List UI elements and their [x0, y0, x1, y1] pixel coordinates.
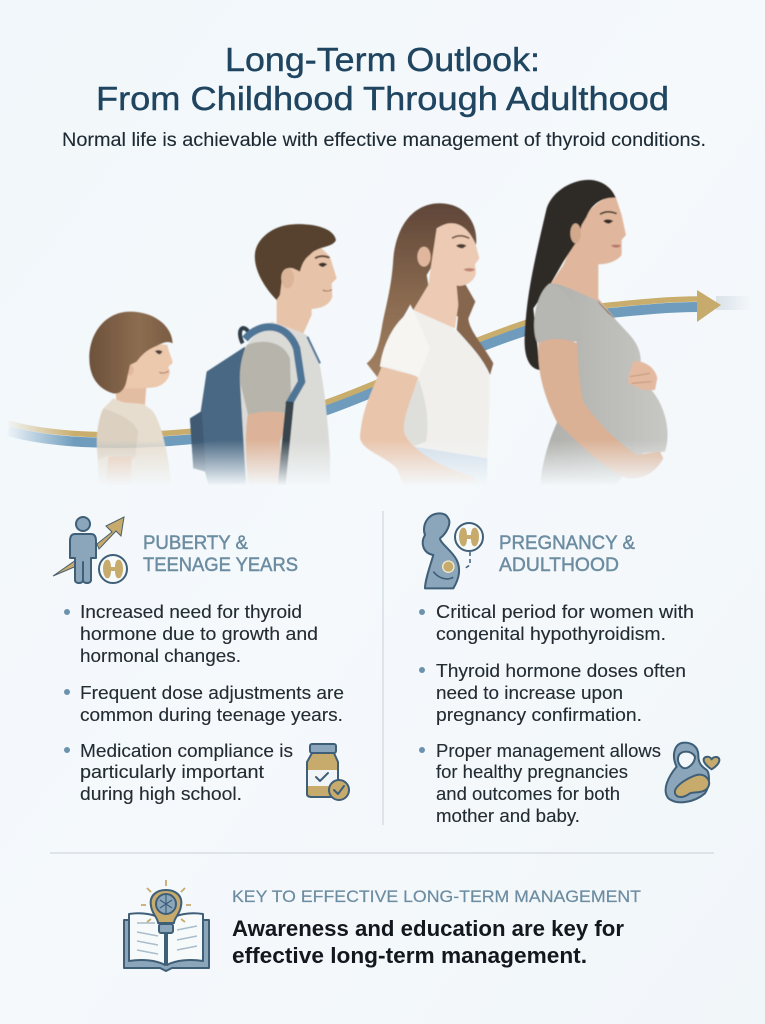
key message: effective long-term management.	[232, 943, 587, 968]
heading: TEENAGE YEARS	[143, 555, 298, 576]
bullet: dose adjustments: common during teenage years.	[80, 705, 343, 725]
panel: key to effective long-term management	[124, 880, 641, 971]
bullet: medication compliance	[64, 741, 293, 804]
bullet: proper management: for healthy pregnancies	[436, 762, 628, 782]
key message	[232, 916, 624, 968]
icon: mother holding baby	[666, 743, 719, 802]
bullet: critical period: congenital hypothyroidism.	[436, 624, 666, 644]
icon: teen with growth arrow and thyroid	[53, 517, 127, 583]
divider: horizontal	[50, 852, 714, 854]
divider: vertical	[382, 511, 384, 825]
subtitle: Normal life is achievable with effective management of thyroid conditions.	[62, 130, 706, 151]
heading: PREGNANCY &	[499, 533, 635, 554]
growth ribbon arrow	[8, 290, 752, 443]
bullet: critical period: Critical period for women with	[436, 602, 694, 622]
icon: medication bottle	[307, 744, 349, 800]
bullet: thyroid hormone need: hormone due to growth and	[80, 624, 318, 644]
heading	[143, 533, 298, 576]
bullet: medication compliance: particularly important	[80, 762, 264, 782]
bullet: medication compliance: Medication compliance is	[80, 741, 293, 761]
figure: young child	[89, 312, 173, 495]
bullet: thyroid hormone need: Increased need for thyroid	[80, 602, 302, 622]
bullet: proper management	[419, 741, 661, 826]
title: Long-Term Outlook:	[225, 41, 540, 78]
heading: ADULTHOOD	[499, 555, 619, 576]
bullet: dose adjustments: Frequent dose adjustments are	[80, 683, 344, 703]
bullet: dose increase: Thyroid hormone doses often	[436, 661, 686, 681]
heading	[499, 533, 635, 576]
bullet: dose increase	[419, 661, 686, 725]
label: KEY TO EFFECTIVE LONG-TERM MANAGEMENT	[232, 887, 641, 906]
title	[96, 41, 669, 117]
icon: open book with lightbulb	[124, 880, 209, 971]
panel: puberty and teenage years	[53, 517, 349, 804]
panel: pregnancy and adulthood	[419, 513, 719, 826]
bullet: critical period	[419, 602, 694, 644]
bullet: thyroid hormone need	[64, 602, 318, 666]
bullet: dose increase: pregnancy confirmation.	[436, 705, 642, 725]
bullet: thyroid hormone need: hormonal changes.	[80, 646, 241, 666]
bullet: proper management: Proper management allows	[436, 741, 661, 761]
figure: teenager with backpack	[190, 224, 337, 495]
heading: PUBERTY &	[143, 533, 248, 554]
bullet: proper management: mother and baby.	[436, 806, 580, 826]
bullet: medication compliance: during high school.	[80, 784, 242, 804]
title: From Childhood Through Adulthood	[96, 80, 669, 117]
icon: pregnant woman with thyroid	[423, 513, 483, 588]
bullet: dose increase: need to increase upon	[436, 683, 623, 703]
key message: Awareness and education are key for	[232, 916, 624, 941]
figure: pregnant woman	[525, 180, 668, 485]
bullet: dose adjustments	[64, 683, 344, 725]
figure: young woman	[360, 203, 493, 492]
bullet: proper management: and outcomes for both	[436, 784, 620, 804]
